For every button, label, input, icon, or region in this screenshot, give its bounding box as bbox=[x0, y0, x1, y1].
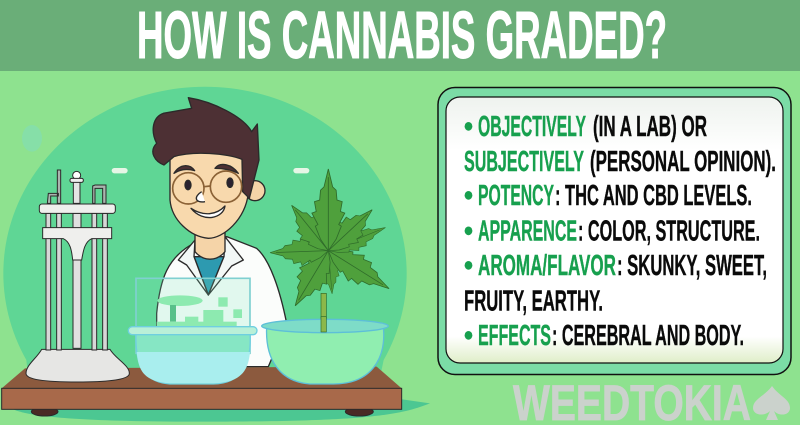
line: aroma continued: FRUITY, EARTHY. bbox=[464, 286, 603, 318]
lab apparatus bbox=[26, 170, 129, 382]
line: objectively: OBJECTIVELY bbox=[478, 111, 586, 143]
panel card bbox=[446, 97, 783, 363]
cannabis leaf bbox=[270, 169, 397, 314]
line: effects: • bbox=[464, 320, 473, 352]
eyebrows bbox=[174, 165, 238, 173]
panel frame bbox=[438, 88, 791, 374]
stem in water bbox=[321, 317, 326, 332]
background circle bbox=[3, 87, 407, 393]
collars bbox=[178, 237, 243, 295]
line: potency: POTENCY bbox=[478, 180, 554, 212]
icon: spade bbox=[753, 386, 790, 420]
line: objectively: • bbox=[464, 111, 473, 143]
watermark logo bbox=[513, 375, 790, 425]
line: subjectively bbox=[464, 146, 776, 178]
lab coat bbox=[157, 237, 287, 367]
line: potency: • bbox=[464, 180, 473, 212]
eyes bbox=[185, 180, 191, 190]
line: appearance: APPARENCE bbox=[478, 216, 577, 248]
glasses bbox=[173, 171, 242, 204]
green blocks bbox=[157, 295, 242, 335]
left glass bowl bbox=[128, 278, 257, 384]
table shadow bbox=[13, 397, 430, 422]
line: effects: EFFECTS bbox=[478, 320, 551, 352]
line: appearance: • bbox=[464, 216, 473, 248]
nose and smile bbox=[191, 192, 225, 218]
line: effects bbox=[464, 320, 744, 352]
potted cannabis plant bbox=[270, 169, 397, 332]
scientist bbox=[153, 98, 287, 367]
panel: grading criteria bbox=[438, 88, 791, 374]
illustration: scientist in lab bbox=[2, 87, 430, 422]
ear bbox=[245, 181, 265, 201]
neck bbox=[195, 227, 225, 259]
line: objectively: (IN A LAB) OR bbox=[593, 111, 707, 143]
line: potency bbox=[464, 180, 752, 212]
right glass bowl bbox=[262, 319, 388, 384]
line: appearance bbox=[464, 216, 760, 248]
line: aroma and flavor: AROMA/FLAVOR bbox=[478, 250, 616, 282]
stem bbox=[321, 293, 326, 332]
title banner bbox=[0, 0, 800, 73]
teal shirt bbox=[194, 257, 224, 295]
table bbox=[2, 367, 402, 416]
line: aroma and flavor: • bbox=[464, 250, 473, 282]
line: subjectively: SUBJECTIVELY bbox=[464, 146, 584, 178]
hair bbox=[153, 98, 259, 198]
face bbox=[170, 143, 248, 238]
